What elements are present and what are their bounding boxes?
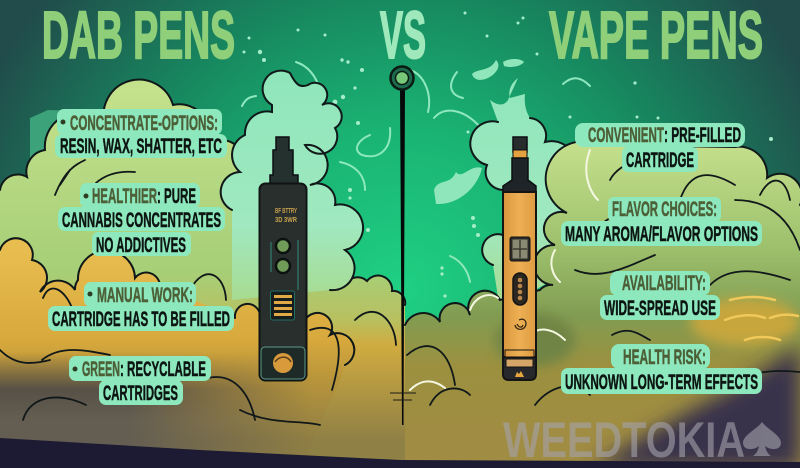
point: health risk	[561, 344, 762, 394]
point: availability: WIDE-SPREAD USE	[604, 297, 716, 320]
point: convenient: CARTRIDGE	[626, 149, 694, 172]
green particles	[242, 12, 773, 298]
divider line	[400, 85, 405, 425]
point: green	[69, 356, 211, 405]
watermark: WEEDTOKIA	[503, 412, 745, 468]
smoke column behind dab pen	[221, 71, 363, 300]
vape pen body	[503, 192, 536, 358]
dab pen	[260, 137, 306, 380]
divider ring	[390, 66, 414, 90]
dab pen label text: BF BTTRY	[275, 208, 297, 215]
point: manual work: CARTRIDGE HAS TO BE FILLED	[52, 308, 230, 331]
smoke column behind vape pen	[470, 78, 576, 310]
icon: spade	[743, 422, 781, 456]
vape pen gold collar	[513, 150, 527, 159]
point: manual work: MANUAL WORK:	[97, 284, 193, 307]
point: healthier: HEALTHIER	[92, 185, 157, 208]
vape pen	[503, 137, 536, 380]
dab pen grille	[270, 291, 294, 320]
grey fade lower left	[0, 354, 294, 454]
bottom dark band	[0, 438, 800, 468]
point: green: CARTRIDGES	[103, 382, 178, 405]
dab pen body	[260, 184, 306, 380]
point: concentrate options: RESIN, WAX, SHATTER, ETC	[60, 135, 222, 158]
title: dab pens: DAB PENS	[42, 0, 235, 73]
right cloud mass	[405, 141, 800, 468]
point: convenient: CONVENIENT	[588, 124, 664, 147]
point: flavor choices	[561, 197, 762, 246]
vape pen tip	[513, 137, 527, 152]
smoke wisps	[434, 59, 524, 204]
point: availability: AVAILABILITY:	[622, 272, 706, 295]
cloud line details	[0, 150, 800, 425]
point: concentrate options: CONCENTRATE-OPTIONS:	[70, 112, 218, 135]
vape pen flame	[515, 371, 524, 377]
vape pen neck	[503, 158, 536, 194]
point: green: : RECYCLABLE	[120, 358, 206, 381]
background block shape	[30, 110, 112, 220]
panel: dab pen points	[48, 109, 234, 405]
point: concentrate options	[55, 109, 227, 158]
dab pen label text: 3D 3WR	[275, 217, 297, 224]
point: convenient	[575, 123, 745, 172]
panel: vape pen points	[561, 123, 762, 394]
title: vs: VS	[380, 0, 426, 73]
point: availability	[600, 271, 720, 320]
point: flavor choices: FLAVOR CHOICES:	[612, 198, 717, 221]
swirl marks	[242, 62, 590, 282]
center divider	[390, 66, 416, 425]
vape pen window	[510, 237, 530, 261]
vape pen base	[503, 357, 536, 380]
point: health risk: HEALTH RISK:	[623, 346, 706, 369]
purple fade lower right	[590, 345, 800, 468]
point: healthier: : PURE	[157, 185, 196, 208]
dab pen bottom section	[261, 347, 305, 379]
point: healthier: NO ADDICTIVES	[96, 234, 186, 257]
dab pen label text	[275, 208, 297, 224]
dab pen buttons	[276, 239, 290, 273]
dab pen mouthpiece	[270, 137, 298, 184]
dab pen cyan trims	[271, 240, 298, 290]
point: manual work	[48, 282, 234, 331]
left lime cloud	[0, 80, 405, 468]
point: convenient: : PRE-FILLED	[664, 124, 741, 147]
dab pen gold knob	[273, 353, 293, 373]
point: healthier: CANNABIS CONCENTRATES	[62, 209, 221, 232]
point: green: GREEN	[82, 358, 120, 381]
vape pen swirl	[515, 319, 526, 329]
vape pen oval buttons	[513, 273, 527, 305]
point: healthier	[58, 183, 225, 257]
gold cloud patches right	[495, 298, 800, 366]
gold cloud left	[0, 238, 354, 468]
